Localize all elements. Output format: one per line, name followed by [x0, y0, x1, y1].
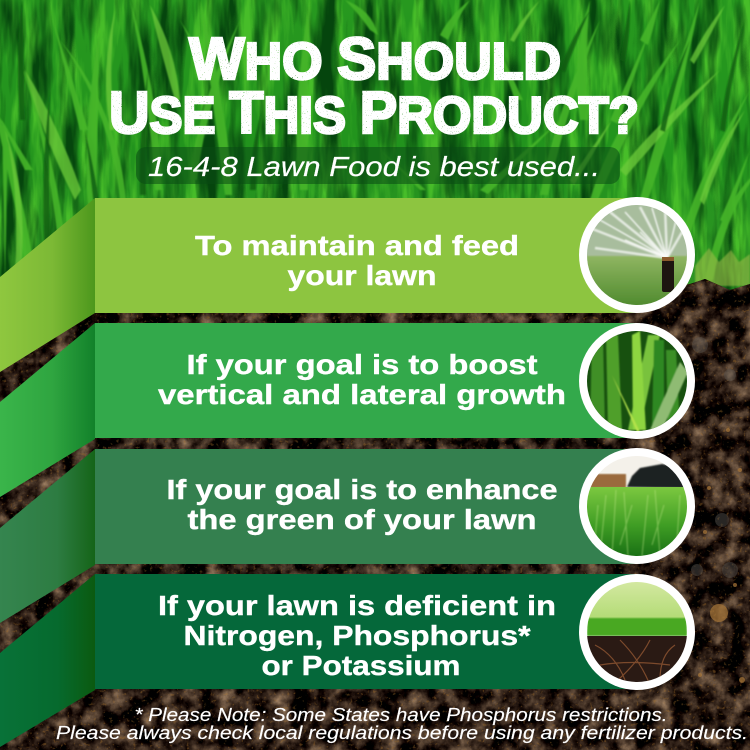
- subtitle with dark band: 16-4-8 Lawn Food is best used...: [148, 151, 600, 182]
- bar 1 text: To maintain and feed: [195, 230, 519, 261]
- panel: bar 1 maintain and feed: [0, 198, 640, 372]
- panel: bar 2 vertical and lateral growth: [0, 323, 640, 497]
- footnote: [56, 704, 748, 743]
- bar 2 text: vertical and lateral growth: [158, 379, 566, 410]
- bar 1 text: your lawn: [288, 260, 436, 291]
- background: grass: [0, 0, 750, 300]
- footnote: * Please Note: Some States have Phosphorus restrictions.: [134, 704, 668, 725]
- bar 4 text: If your lawn is deficient in: [158, 590, 556, 621]
- ribbon fold 1: [0, 198, 95, 372]
- ribbon fold 2: [0, 323, 95, 497]
- bar 1 text: [195, 230, 519, 291]
- ribbon fold 4: [0, 574, 95, 747]
- bar 3 text: [166, 474, 558, 535]
- ribbon fold 3: [0, 449, 95, 623]
- title: WHO SHOULD: [189, 26, 561, 92]
- bar 2 body: [95, 323, 640, 438]
- icon: mower on lawn photo: [579, 448, 695, 564]
- icon: lawn and roots photo: [579, 574, 695, 690]
- bar 4 body: [95, 574, 640, 689]
- bar 4 text: Nitrogen, Phosphorus*: [184, 620, 531, 651]
- footnote: Please always check local regulations before using any fertilizer products.: [56, 722, 748, 743]
- icon: sprinkler photo: [579, 197, 695, 313]
- icon: grass blades photo: [579, 323, 695, 439]
- bar 3 text: If your goal is to enhance: [166, 474, 558, 505]
- bar 4 text: [158, 590, 556, 681]
- bar 2 text: [158, 349, 566, 410]
- background: soil: [0, 275, 750, 750]
- bar 3 text: the green of your lawn: [188, 504, 536, 535]
- title: [109, 26, 639, 146]
- bar 3 body: [95, 449, 640, 564]
- bar 2 text: If your goal is to boost: [186, 349, 538, 380]
- bar 1 body: [95, 198, 640, 313]
- bar 4 text: or Potassium: [262, 650, 460, 681]
- title: USE THIS PRODUCT?: [109, 80, 639, 146]
- panel: bar 3 enhance the green: [0, 449, 640, 623]
- panel: bar 4 deficient: [0, 574, 640, 747]
